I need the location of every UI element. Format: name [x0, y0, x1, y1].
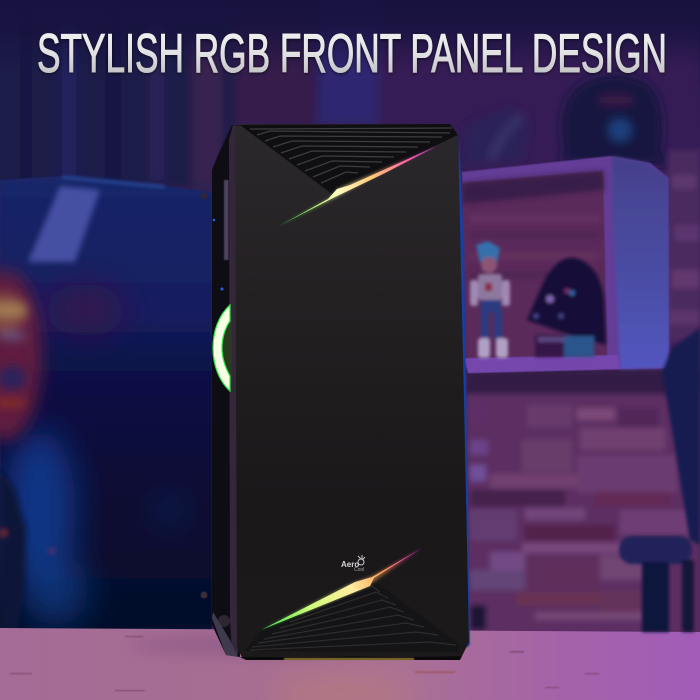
case blue edge glow — [458, 135, 470, 648]
top vent grille — [240, 124, 458, 194]
shelf interior — [462, 171, 607, 358]
AeroCool logo: Aero — [341, 560, 359, 569]
white wall cube shelf — [462, 156, 669, 373]
figure: dark helmet — [527, 258, 606, 357]
bottom vent grille — [244, 580, 460, 652]
case side panel — [200, 125, 240, 657]
monitor with blurred artwork — [0, 176, 212, 630]
brick wall lower — [466, 370, 700, 634]
top light slash — [279, 146, 437, 226]
figure: blue-haired toy — [470, 241, 510, 358]
desk — [0, 628, 700, 700]
PC case — [200, 124, 470, 660]
AeroCool logo — [341, 555, 365, 573]
brick wall right column — [668, 150, 700, 340]
upper shelf figures — [462, 75, 670, 165]
gaming chair — [619, 328, 700, 632]
bottom light slash — [261, 548, 422, 630]
monitor glare — [28, 186, 100, 262]
AeroCool logo: Cool — [354, 567, 364, 573]
green RGB fan ring — [213, 305, 232, 391]
front panel — [235, 124, 469, 657]
top fade behind title — [0, 0, 700, 70]
